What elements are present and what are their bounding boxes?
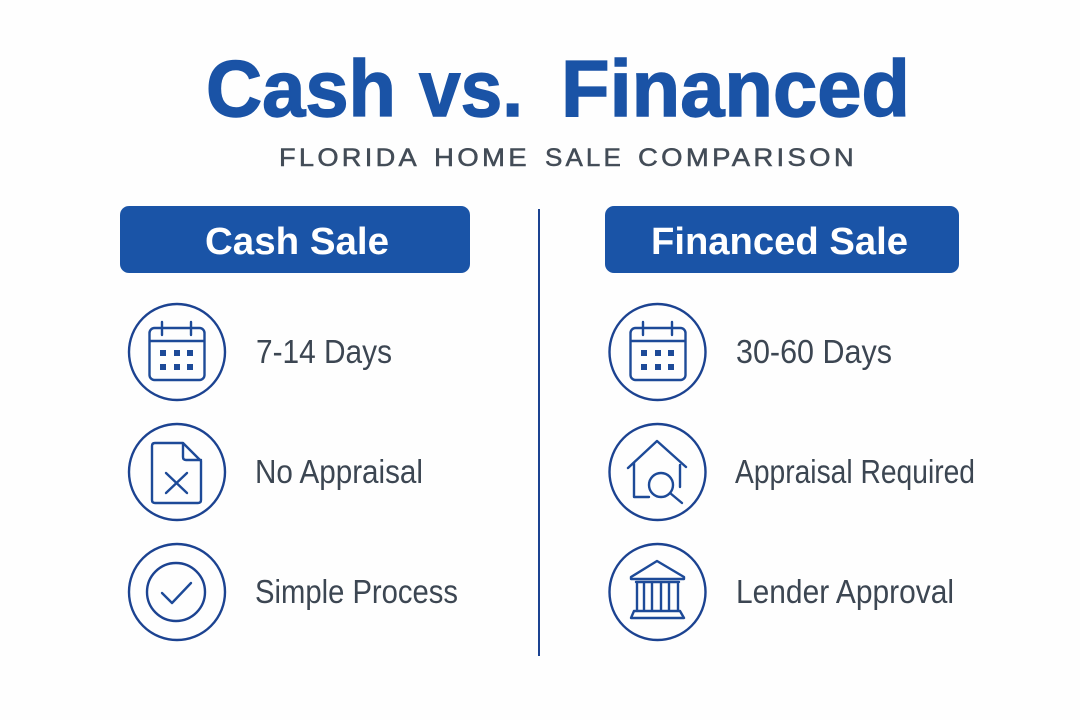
center divider [538, 209, 540, 656]
subtitle: SALE [545, 144, 624, 172]
panel: cash sale [120, 206, 470, 640]
subtitle: HOME [434, 144, 530, 172]
subtitle: FLORIDA [279, 144, 420, 172]
header: financed sale [605, 206, 959, 273]
subtitle: COMPARISON [638, 144, 857, 172]
title: Financed [561, 44, 910, 133]
header: financed sale: Financed Sale [651, 221, 908, 263]
text: 30-60 days: 30-60 Days [736, 333, 892, 370]
title [206, 44, 910, 133]
icon: calendar [610, 304, 706, 400]
header: cash sale: Cash Sale [205, 221, 389, 263]
header: cash sale [120, 206, 470, 273]
text: lender approval: Lender Approval [736, 573, 954, 610]
text: appraisal required: Appraisal Required [735, 453, 975, 490]
text: no appraisal: No Appraisal [255, 453, 423, 490]
icon: document with x [129, 424, 225, 520]
text: 7-14 days: 7-14 Days [256, 333, 392, 370]
icon: house with magnifier [610, 424, 706, 520]
icon: check mark [129, 544, 225, 640]
icon: bank building [610, 544, 706, 640]
title: Cash [206, 44, 396, 133]
subtitle [279, 144, 857, 172]
panel: financed sale [605, 206, 975, 640]
title: vs. [419, 44, 523, 133]
text: simple process: Simple Process [255, 573, 458, 610]
icon: calendar [129, 304, 225, 400]
